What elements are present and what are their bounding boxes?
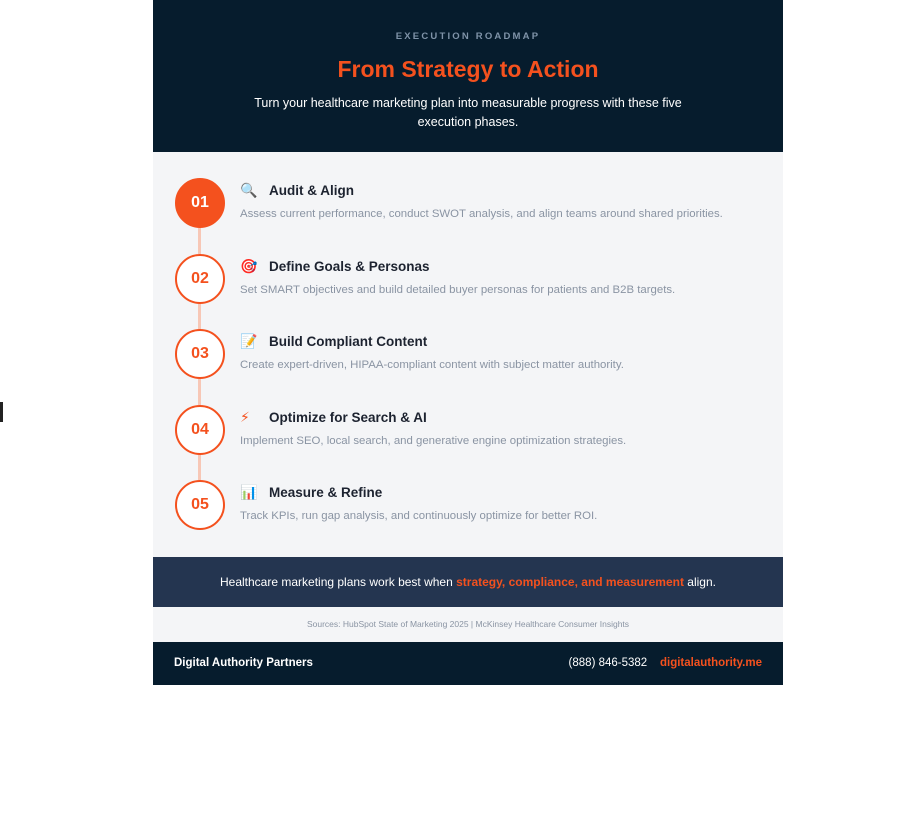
contact: (888) 846-5382 digitalauthority.me — [569, 657, 762, 669]
header — [153, 0, 783, 152]
title: From Strategy to Action — [337, 56, 599, 82]
circle 03 — [175, 329, 225, 379]
kicker: EXECUTION ROADMAP — [396, 31, 540, 42]
step 3 — [175, 329, 624, 379]
circle 04 — [175, 405, 225, 455]
step title: Define Goals & Personas — [269, 259, 430, 274]
step title: Optimize for Search & AI — [269, 410, 427, 425]
sources — [153, 607, 783, 642]
icon: magnifier: 🔍 — [240, 182, 257, 198]
subtitle: Turn your healthcare marketing plan into measurable progress with these five execution phases. — [254, 96, 682, 129]
callout band — [153, 557, 783, 607]
circle 02 — [175, 254, 225, 304]
step title: Build Compliant Content — [269, 334, 427, 349]
circle 02: 02 — [191, 270, 209, 287]
icon: target: 🎯 — [240, 258, 257, 274]
edge mark — [0, 402, 3, 422]
step title: Audit & Align — [269, 183, 354, 198]
card — [153, 0, 783, 685]
footer — [153, 642, 783, 685]
icon: lightning: ⚡ — [240, 409, 250, 425]
step 4 — [175, 405, 626, 455]
brand: Digital Authority Partners — [174, 657, 313, 669]
circle 05: 05 — [191, 496, 209, 513]
step desc: Assess current performance, conduct SWOT analysis, and align teams around shared priorities. — [240, 208, 723, 220]
circle 05 — [175, 480, 225, 530]
sources: Sources: HubSpot State of Marketing 2025 | McKinsey Healthcare Consumer Insights — [307, 619, 629, 629]
callout band: Healthcare marketing plans work best when strategy, compliance, and measurement align. — [220, 575, 716, 589]
circle 04: 04 — [191, 421, 209, 438]
step desc: Set SMART objectives and build detailed buyer personas for patients and B2B targets. — [240, 284, 675, 296]
step 2 — [175, 254, 675, 304]
step desc: Track KPIs, run gap analysis, and continuously optimize for better ROI. — [240, 510, 597, 522]
icon: chart: 📊 — [240, 484, 257, 500]
step 1 — [175, 178, 723, 228]
step 5 — [175, 480, 597, 530]
circle 03: 03 — [191, 345, 209, 362]
circle 01: 01 — [191, 194, 209, 211]
panel: steps — [153, 152, 783, 557]
icon: memo: 📝 — [240, 333, 257, 349]
step desc: Create expert-driven, HIPAA-compliant content with subject matter authority. — [240, 359, 624, 371]
circle 01 — [175, 178, 225, 228]
step title: Measure & Refine — [269, 485, 382, 500]
step desc: Implement SEO, local search, and generative engine optimization strategies. — [240, 435, 626, 447]
